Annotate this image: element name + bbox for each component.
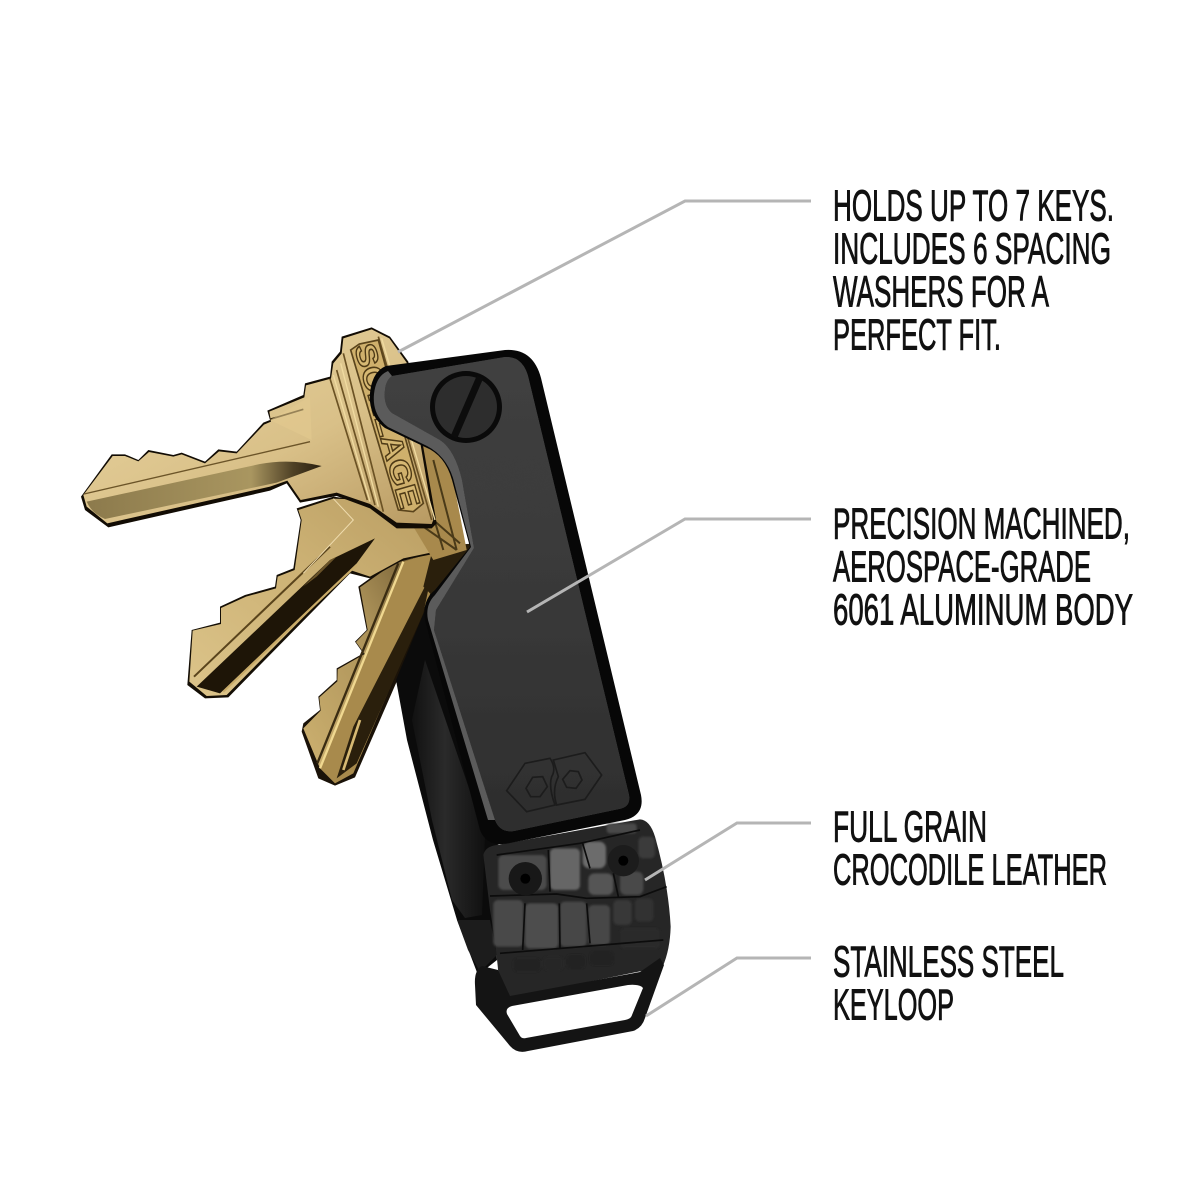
- leather rivets: [509, 845, 639, 895]
- text: stainless steel keyloop: [833, 938, 1064, 1030]
- plate outer shell: [370, 350, 642, 844]
- leather scales: [493, 823, 660, 972]
- stainless steel keyloop: [475, 958, 664, 1052]
- callout line: body: [527, 519, 811, 612]
- leather creases: [490, 830, 667, 953]
- key head lettering: SCHLAGE: [347, 340, 426, 512]
- plate bevel: [374, 371, 495, 820]
- keyholder back body: [396, 610, 520, 975]
- text: holds up to 7 keys: [833, 182, 1114, 360]
- text: holds up to 7 keys: WASHERS FOR A: [833, 268, 1049, 316]
- text: crocodile leather: [833, 802, 1107, 894]
- keys: [81, 327, 475, 786]
- text: stainless steel keyloop: KEYLOOP: [833, 980, 954, 1030]
- text: crocodile leather: FULL GRAIN: [833, 802, 987, 852]
- callout line: keyloop: [646, 958, 811, 1016]
- callout line: keys: [398, 201, 811, 352]
- lower strap side: [457, 920, 497, 972]
- key stack under plate: [403, 363, 475, 603]
- plate face: [385, 357, 629, 831]
- back body inner highlight: [412, 660, 485, 918]
- key 1: top brass key with head: [81, 327, 437, 528]
- aluminum body plate: [370, 350, 642, 844]
- key 2: middle brass key: [187, 497, 453, 698]
- callout line: leather: [645, 823, 811, 880]
- key 3: lowest brass key: [302, 550, 457, 786]
- text: holds up to 7 keys: PERFECT FIT.: [833, 310, 1001, 360]
- screw: [430, 371, 502, 443]
- text: precision machined body: [833, 500, 1133, 634]
- embossed logo: [507, 753, 602, 812]
- leather band: [483, 819, 671, 1000]
